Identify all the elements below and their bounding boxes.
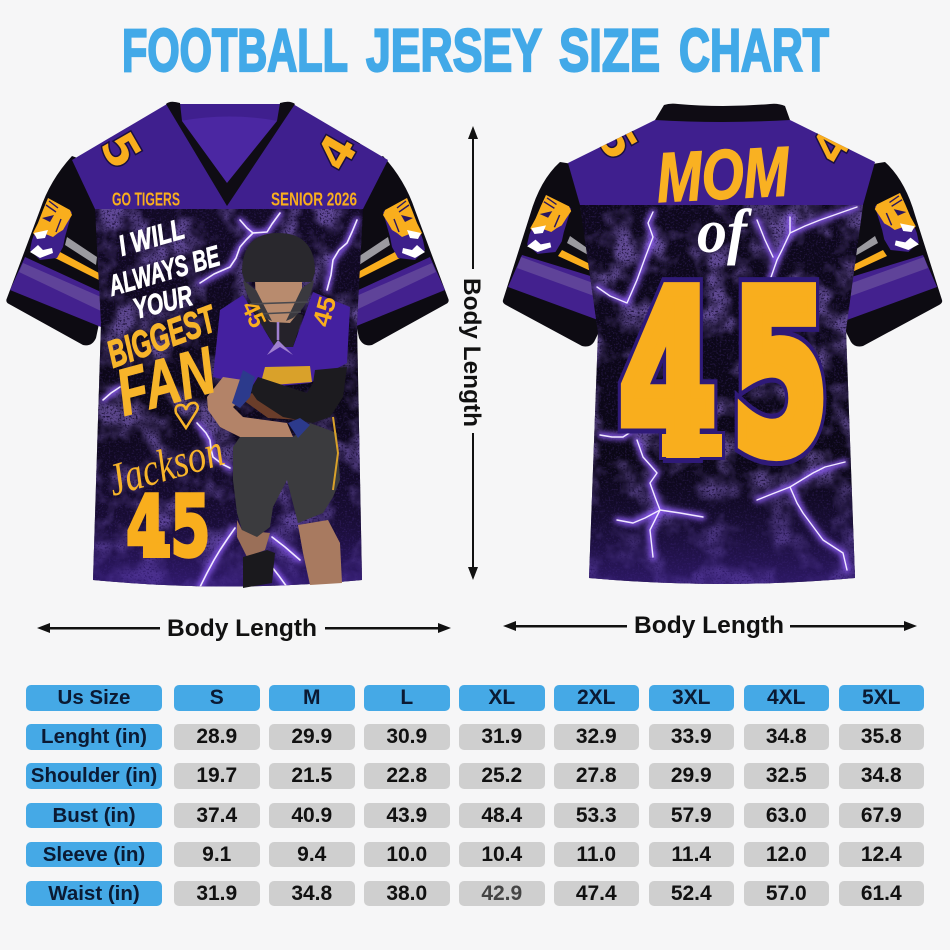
header row: Us Size [58, 686, 130, 709]
header row: L [400, 686, 413, 709]
player photo [207, 233, 350, 588]
left sleeve [6, 156, 110, 345]
length row [26, 724, 924, 750]
title: CHART [679, 17, 829, 84]
slogan white: I WILL [115, 214, 188, 263]
front jersey [6, 95, 449, 595]
vertical measure arrow: Body Length [458, 278, 485, 427]
player left arm [207, 377, 293, 437]
header row: 5XL [862, 686, 900, 709]
sleeve row: 12.0 [766, 842, 807, 866]
bust row: 53.3 [576, 804, 617, 826]
header row: S [210, 686, 224, 709]
shoulder row [26, 763, 924, 789]
waist row: 34.8 [291, 882, 332, 904]
back number: 45 [619, 245, 844, 504]
shoulder row: 27.8 [576, 764, 617, 787]
slogan gold: FAN [108, 332, 223, 430]
title: JERSEY [366, 17, 542, 84]
player jersey numbers: 45 [236, 297, 271, 332]
player legs [237, 520, 342, 588]
front number: 45 [126, 479, 215, 577]
back number: 45 [619, 245, 844, 504]
bust row: 67.9 [861, 804, 902, 826]
player jersey [213, 292, 350, 388]
shoulder number left: 45 [74, 95, 152, 178]
waist row: Waist (in) [48, 882, 140, 904]
sleeve row [26, 842, 924, 867]
length row: 34.8 [766, 725, 807, 748]
header row: 4XL [767, 686, 806, 709]
header row: M [303, 686, 320, 709]
length row: 31.9 [481, 725, 522, 748]
back lightning panel [575, 200, 870, 595]
waist row: 57.0 [766, 882, 807, 904]
slogan white [104, 214, 225, 326]
header row [26, 685, 924, 711]
title: SIZE [559, 17, 660, 84]
sleeve row: 12.4 [861, 842, 902, 866]
shoulder row: 22.8 [386, 764, 427, 787]
bust row: 63.0 [766, 804, 807, 826]
football [243, 385, 300, 420]
shoulder row: 29.9 [671, 764, 712, 787]
waist row: 42.9 [481, 882, 522, 904]
back left sleeve [503, 162, 610, 346]
player helmet and face [242, 233, 315, 355]
sleeve row: 11.4 [671, 842, 711, 866]
bust row: 48.4 [481, 804, 522, 826]
back jersey [503, 86, 942, 595]
left measure arrow [37, 615, 451, 642]
waist row [26, 881, 924, 906]
size table [26, 685, 924, 906]
yoke [72, 104, 388, 209]
header row: XL [488, 686, 515, 709]
collar [166, 102, 295, 206]
length row: 32.9 [576, 725, 617, 748]
title: FOOTBALL [122, 17, 348, 84]
sleeve row: 10.0 [386, 842, 427, 866]
front lightning panel [85, 205, 370, 595]
waist row: 52.4 [671, 882, 712, 904]
bust row: 57.9 [671, 804, 712, 826]
title [122, 17, 829, 84]
left measure arrow: Body Length [167, 615, 317, 642]
length row: Lenght (in) [41, 725, 147, 748]
go tigers label: GO TIGERS [112, 190, 180, 210]
player photo: 45 [307, 293, 342, 330]
waist row: 31.9 [196, 882, 237, 904]
bust row: 37.4 [196, 804, 237, 826]
right measure arrow: Body Length [634, 612, 784, 639]
back right sleeve [835, 162, 942, 346]
slogan gold: BIGGEST [102, 298, 223, 376]
shoulder row: Shoulder (in) [31, 764, 157, 787]
slogan white: ALWAYS BE [104, 240, 225, 303]
back shoulder number left: 45 [570, 86, 648, 169]
back collar [655, 104, 790, 122]
sleeve row: 10.4 [481, 842, 522, 866]
back shoulder number right: 45 [801, 90, 879, 172]
sleeve row: 9.1 [202, 842, 231, 866]
senior 2026 label: SENIOR 2026 [271, 190, 357, 210]
length row: 35.8 [861, 725, 902, 748]
vertical measure arrow [458, 126, 485, 580]
shoulder row: 19.7 [196, 764, 237, 787]
waist row: 38.0 [386, 882, 427, 904]
shoulder row: 34.8 [861, 764, 902, 787]
bust row: 40.9 [291, 804, 332, 826]
shoulder row: 21.5 [291, 764, 332, 787]
length row: 29.9 [291, 725, 332, 748]
of script: of [697, 198, 752, 266]
right sleeve [345, 156, 449, 345]
shoulder row: 25.2 [481, 764, 522, 787]
waist row: 61.4 [861, 882, 902, 904]
player shorts [233, 423, 340, 537]
length row: 28.9 [196, 725, 237, 748]
player black sleeve [250, 367, 347, 423]
sleeve row: 11.0 [576, 842, 616, 866]
header row: 3XL [672, 686, 710, 709]
right measure arrow [503, 612, 917, 639]
heart icon [176, 403, 198, 428]
shoulder row: 32.5 [766, 764, 807, 787]
header row: 2XL [577, 686, 616, 709]
player gloves [232, 370, 310, 438]
length row: 30.9 [386, 725, 427, 748]
sleeve row: Sleeve (in) [43, 842, 145, 866]
bust row: 43.9 [386, 804, 427, 826]
slogan gold [102, 298, 223, 430]
waist row: 47.4 [576, 882, 617, 904]
sleeve row: 9.4 [297, 842, 326, 866]
back yoke [568, 120, 875, 205]
mom heading: MOM [655, 132, 792, 217]
bust row: Bust (in) [52, 804, 136, 826]
slogan white: YOUR [130, 280, 196, 326]
length row: 33.9 [671, 725, 712, 748]
shoulder number right: 45 [306, 97, 384, 179]
name script: Jackson [102, 424, 229, 506]
bust row [26, 803, 924, 828]
